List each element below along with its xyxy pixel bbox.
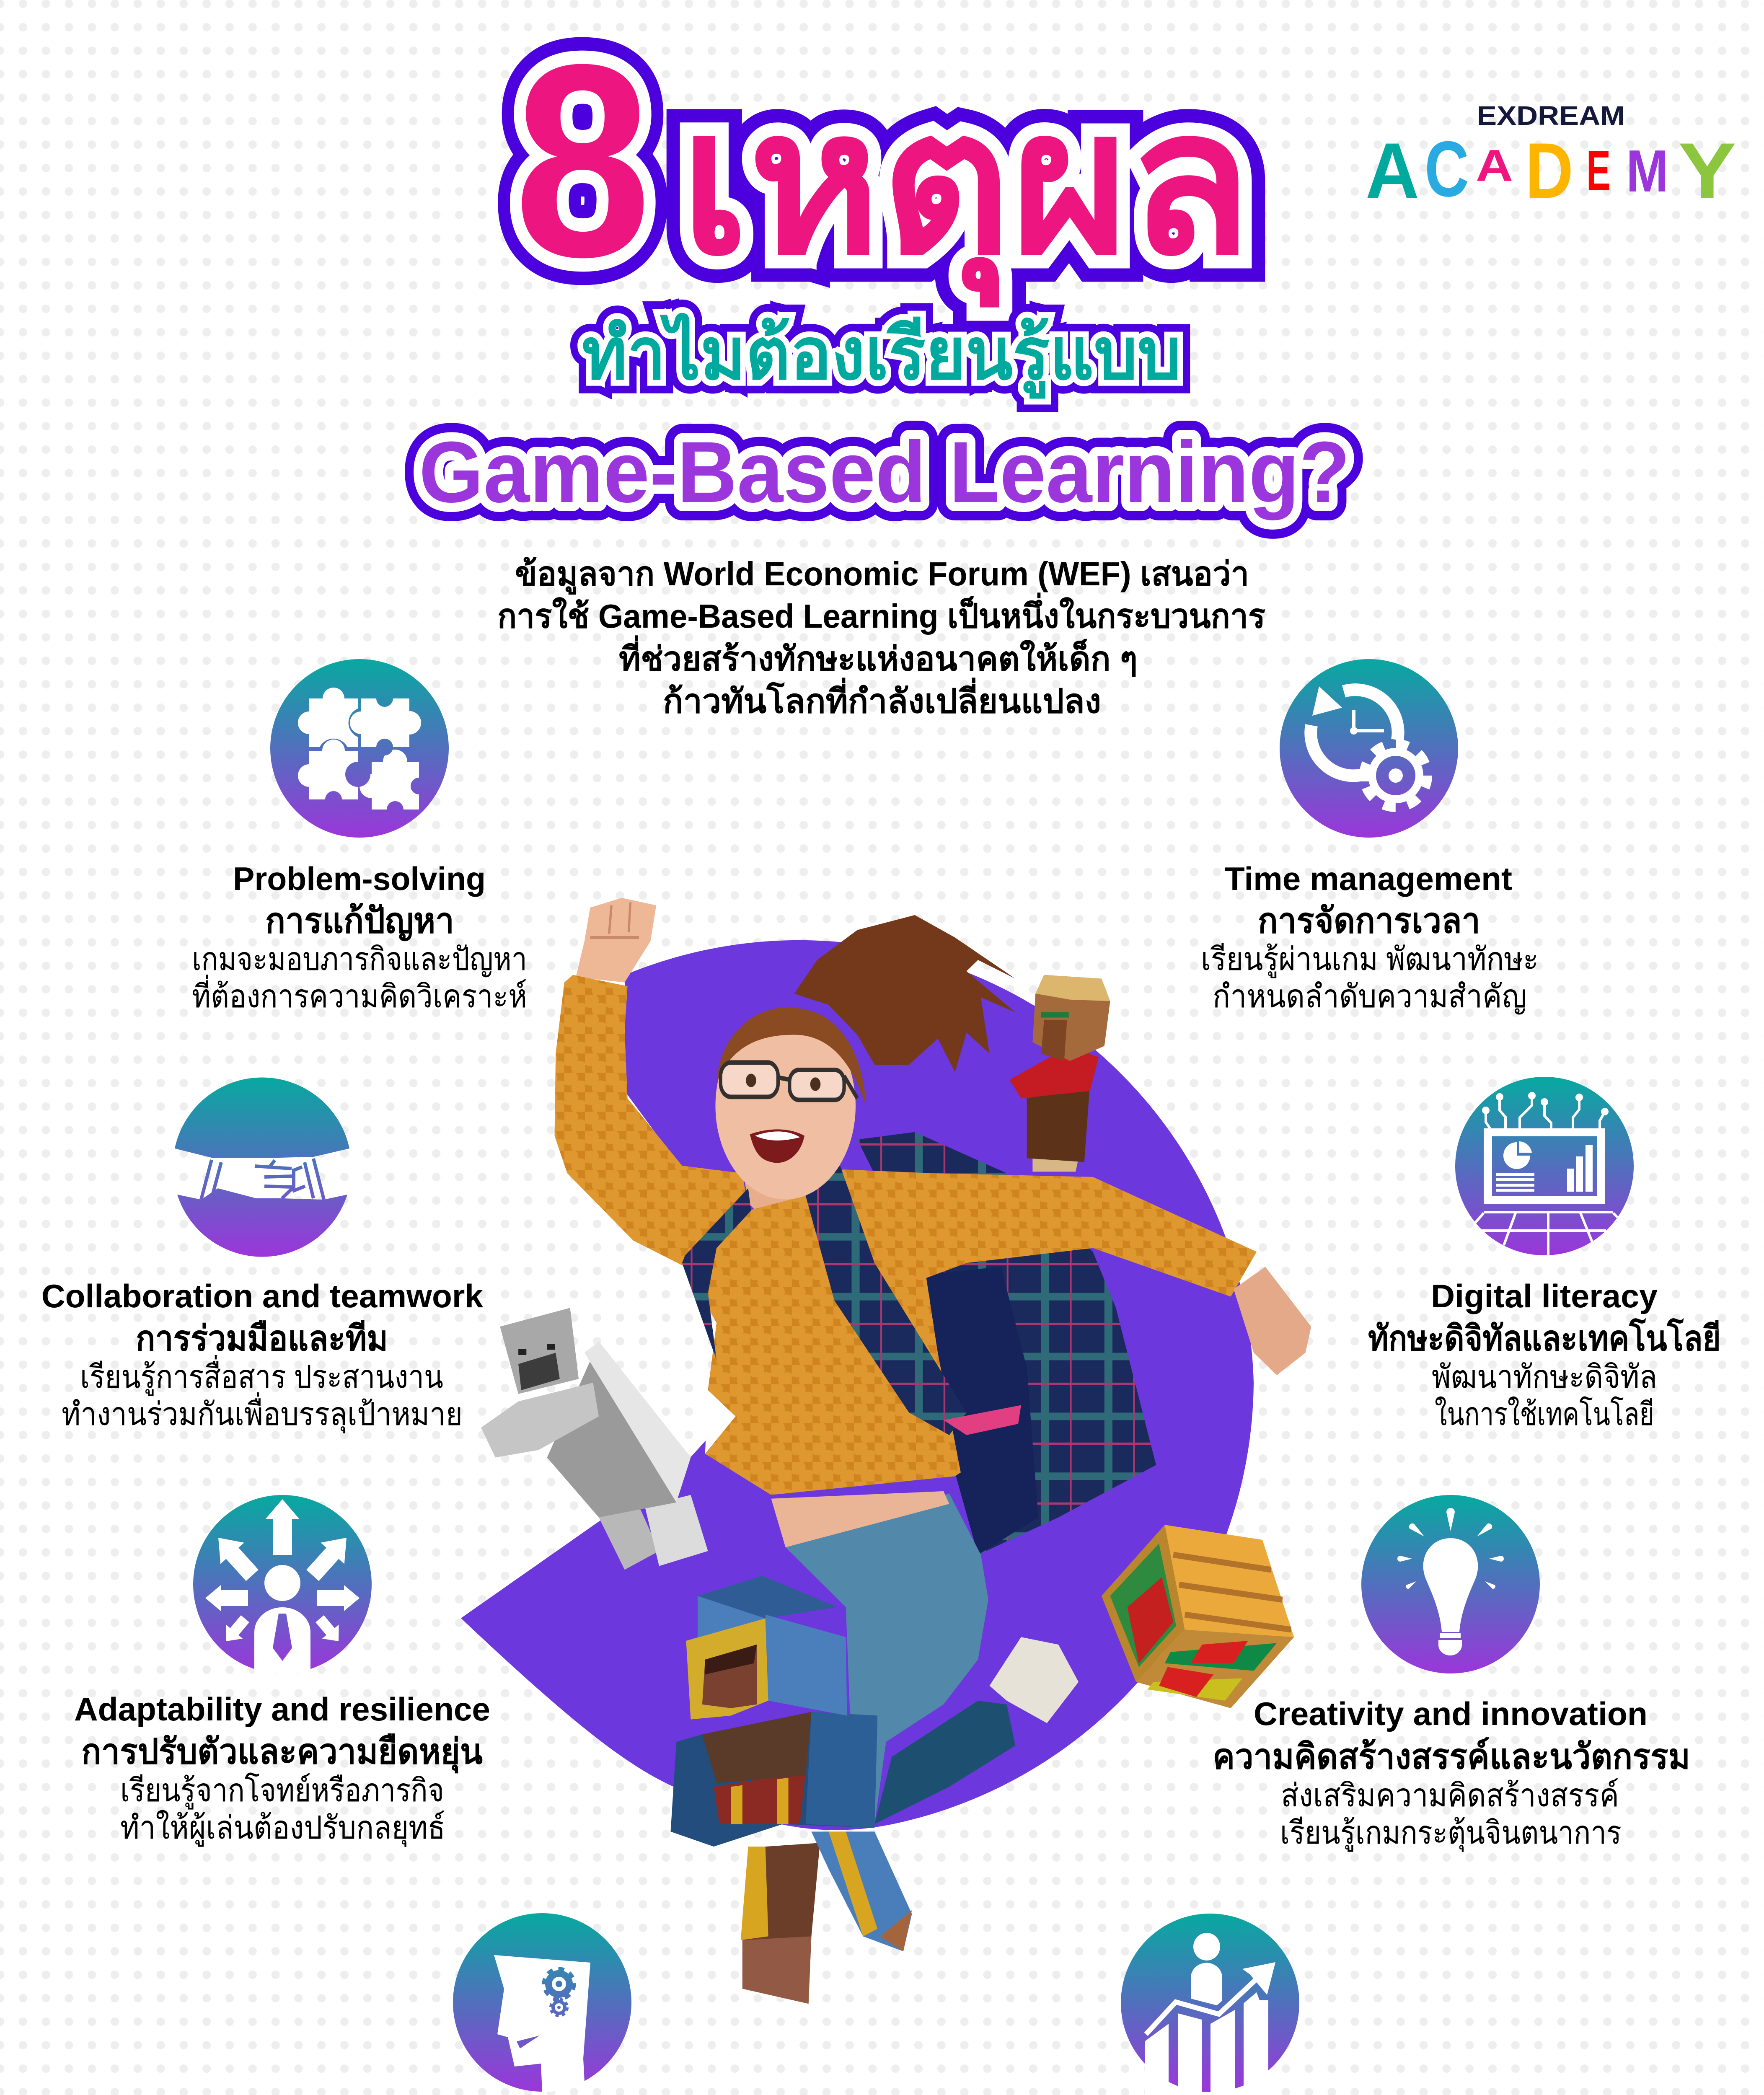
- game character: explorer villager: [670, 1576, 912, 2004]
- Thai heading: การร่วมมือและทีม: [136, 1319, 388, 1358]
- girl: white patch: [705, 1390, 735, 1454]
- icon: head with gears: [453, 1913, 631, 2092]
- Thai heading: การแก้ปัญหา: [265, 901, 454, 942]
- title: 8 เหตุผล outline layer: เหตุผล: [680, 70, 1252, 308]
- logo wordmark: ACADEMY: C: [1425, 125, 1469, 213]
- description: ทำให้ผู้เล่นต้องปรับกลยุทธ์: [120, 1810, 445, 1847]
- description: เรียนรู้ผ่านเกม พัฒนาทักษะ: [1201, 941, 1539, 978]
- Thai heading: ความคิดสร้างสรรค์และนวัตกรรม: [1213, 1737, 1690, 1776]
- girl: raised hand: [576, 898, 656, 983]
- Game-Based Learning outline layer: Game-Based Learning?: [419, 424, 1350, 520]
- title block: [419, 7, 1350, 520]
- title: 8 เหตุผล: เหตุผล: [680, 70, 1252, 308]
- logo wordmark: ACADEMY: A: [1366, 127, 1419, 215]
- logo wordmark: ACADEMY: A: [1476, 140, 1513, 191]
- description: พัฒนาทักษะดิจิทัล: [1432, 1359, 1657, 1395]
- title: 8 เหตุผล outline layer: 8: [514, 7, 651, 314]
- girl: sweater: [555, 975, 1257, 1495]
- logo wordmark: EXDREAM: EXDREAM: [1477, 101, 1625, 131]
- Thai heading: การปรับตัวและความยืดหยุ่น: [81, 1732, 483, 1774]
- description: เรียนรู้เกมกระตุ้นจินตนาการ: [1280, 1815, 1622, 1852]
- logo: Exdream Academy: [1366, 101, 1736, 215]
- Thai heading: ทักษะดิจิทัลและเทคโนโลยี: [1368, 1318, 1721, 1358]
- heading: Problem-solving: Problem-solving: [233, 860, 486, 897]
- description: ในการใช้เทคโนโลยี: [1435, 1396, 1654, 1432]
- description: [1201, 941, 1539, 1014]
- icon: person with arrows: [193, 1495, 372, 1673]
- heading: Adaptability and resilience: Adaptability and resilience: [74, 1691, 490, 1728]
- girl: head: [715, 1007, 866, 1199]
- purple swoosh background shape: [461, 940, 1254, 1830]
- description: [120, 1772, 445, 1847]
- description: ส่งเสริมความคิดสร้างสรรค์: [1281, 1778, 1619, 1813]
- title: 8 เหตุผล: [514, 7, 1252, 314]
- game character: villager: [1009, 975, 1110, 1172]
- panel: time management: [1201, 659, 1539, 1014]
- title: 8 เหตุผล outline layer: [514, 7, 1252, 314]
- central illustration: girl and game characters: [481, 898, 1311, 2004]
- logo wordmark: ACADEMY: Y: [1678, 127, 1736, 215]
- panel: digital literacy: [1368, 1077, 1721, 1432]
- panel: adaptability: [74, 1495, 490, 1847]
- intro paragraph: [497, 555, 1265, 720]
- Game-Based Learning heading: Game-Based Learning?: [419, 424, 1350, 520]
- logo wordmark: ACADEMY: [1366, 125, 1736, 215]
- description: ที่ต้องการความคิดวิเคราะห์: [192, 975, 527, 1014]
- heading: Digital literacy: Digital literacy: [1431, 1278, 1658, 1314]
- description: [1280, 1778, 1622, 1852]
- intro paragraph: ข้อมูลจาก World Economic Forum (WEF) เสนอว่า: [515, 555, 1249, 595]
- intro paragraph: ก้าวทันโลกที่กำลังเปลี่ยนแปลง: [663, 678, 1101, 720]
- icon: person on growth chart: [1121, 1914, 1299, 2095]
- description: ทำงานร่วมกันเพื่อบรรลุเป้าหมาย: [62, 1392, 463, 1433]
- girl: backpack: [857, 1132, 1156, 1555]
- heading: Time management: Time management: [1225, 860, 1512, 897]
- panel: problem-solving: [192, 659, 527, 1014]
- logo wordmark: ACADEMY: M: [1626, 138, 1668, 204]
- logo wordmark: ACADEMY: D: [1525, 127, 1573, 215]
- subtitle: ทำไมต้องเรียนรู้แบบ: [582, 313, 1181, 399]
- girl: neck: [742, 1158, 811, 1226]
- description: [62, 1355, 463, 1433]
- panel: collaboration: [41, 1078, 484, 1433]
- icon: digital screen: [1455, 1077, 1634, 1255]
- heading: Collaboration and teamwork: Collaboration and teamwork: [41, 1278, 484, 1314]
- heading: Creativity and innovation: Creativity and innovation: [1254, 1695, 1648, 1732]
- icon: light bulb: [1361, 1495, 1540, 1673]
- icon: handshake: [175, 1078, 349, 1257]
- girl: ponytail: [794, 915, 1015, 1072]
- description: [192, 941, 527, 1014]
- intro paragraph: การใช้ Game-Based Learning เป็นหนึ่งในกระบวนการ: [497, 592, 1265, 635]
- panel: creativity: [1213, 1495, 1690, 1852]
- game character: polar bear: [481, 1308, 708, 1570]
- description: กำหนดลำดับความสำคัญ: [1213, 979, 1527, 1014]
- girl: legs and jeans: [771, 1491, 1079, 1824]
- logo wordmark: ACADEMY: E: [1586, 140, 1611, 202]
- intro paragraph: ที่ช่วยสร้างทักษะแห่งอนาคตให้เด็ก ๆ: [619, 635, 1138, 678]
- icon: clock and gear: [1280, 659, 1458, 838]
- description: เรียนรู้จากโจทย์หรือภารกิจ: [120, 1772, 444, 1810]
- subtitle outline layer: ทำไมต้องเรียนรู้แบบ: [582, 313, 1181, 399]
- Thai heading: การจัดการเวลา: [1258, 901, 1480, 940]
- game object: bookshelf: [1102, 1525, 1294, 1708]
- icon: puzzle pieces: [270, 659, 449, 838]
- description: เรียนรู้การสื่อสาร ประสานงาน: [80, 1355, 443, 1396]
- girl: right fist: [1234, 1267, 1311, 1375]
- description: เกมจะมอบภารกิจและปัญหา: [192, 941, 527, 977]
- panel: decision-making: [359, 1913, 726, 2095]
- description: [1432, 1359, 1657, 1432]
- title: 8 เหตุผล: 8: [514, 7, 651, 314]
- panel: self-improvement: [1070, 1914, 1351, 2095]
- girl: backpack straps: [682, 1166, 1021, 1435]
